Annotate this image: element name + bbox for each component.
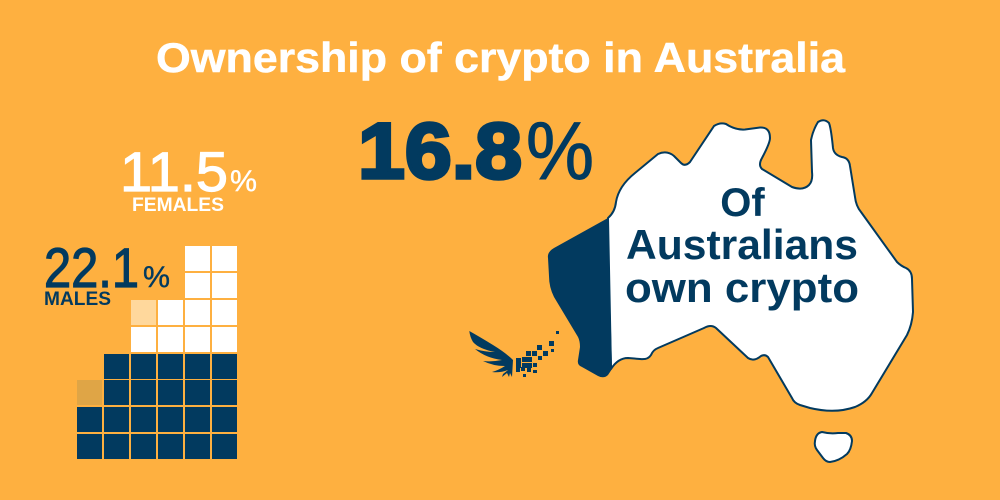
main statistic: 16.8% [358,106,594,197]
stat: females 11.5% [120,140,257,216]
mainland outline [608,120,913,411]
stat: males 22.1%: % [143,261,170,294]
map label: Of [720,181,765,225]
stat: males 22.1%: 22.1 [44,236,139,299]
Western Australia shaded region [548,218,612,377]
stat: males 22.1%: MALES [44,288,111,310]
title: Ownership of crypto in Australia [156,34,846,81]
stat: females 11.5%: % [230,165,257,198]
map of Australia [548,120,913,462]
stat: females 11.5%: FEMALES [132,194,224,216]
logo: wing with pixels [469,331,559,377]
main statistic: 16.8%: 16.8 [358,106,522,195]
waffle chart: females [131,246,237,352]
map label: own crypto [625,264,859,311]
waffle chart: males [77,354,237,459]
map label [625,181,859,311]
map label: Australians [626,221,858,268]
main statistic: 16.8%: % [526,106,594,197]
Tasmania [815,432,852,462]
stat: females 11.5%: 11.5 [120,140,228,203]
